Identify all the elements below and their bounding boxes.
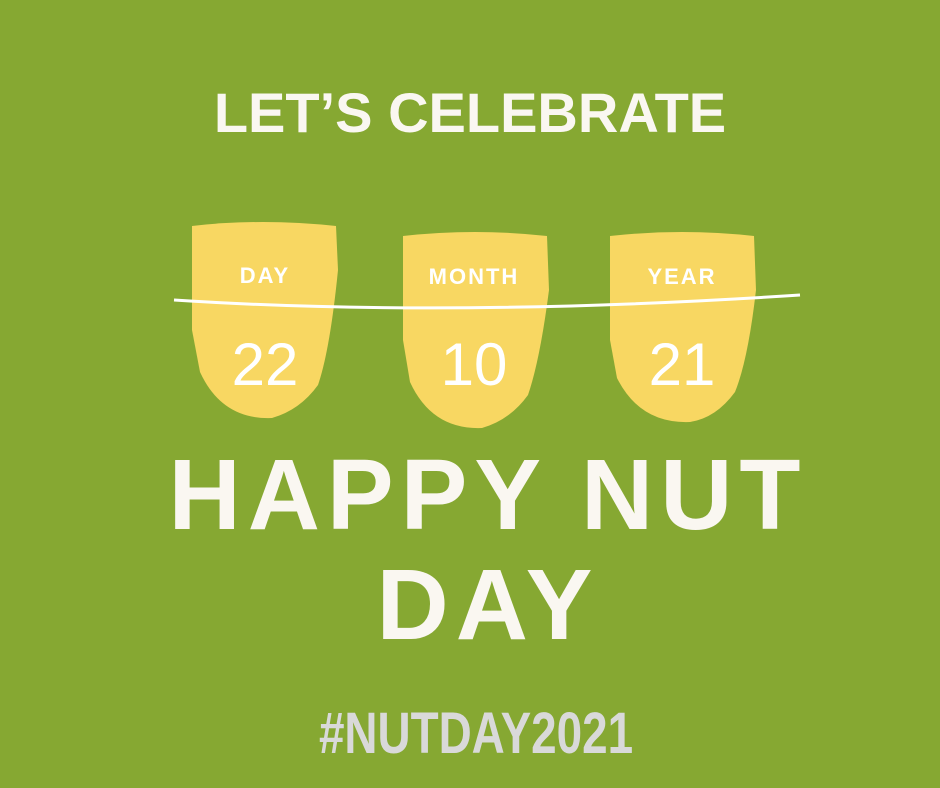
card: month	[403, 232, 549, 428]
heading: happy nut day: DAY	[377, 549, 599, 661]
title: LET’S CELEBRATE	[214, 81, 726, 144]
heading: happy nut day: HAPPY NUT	[168, 439, 808, 551]
hashtag: #NUTDAY2021	[319, 701, 633, 766]
heading: happy nut day	[168, 439, 808, 661]
card: year: 21	[649, 331, 715, 398]
card: month: MONTH	[429, 264, 519, 289]
card: month: 10	[441, 331, 507, 398]
card: day: DAY	[240, 263, 290, 288]
card: year	[610, 232, 756, 422]
card: day	[192, 222, 338, 418]
card: year: YEAR	[647, 264, 717, 289]
string line	[174, 295, 800, 308]
card: day: 22	[232, 331, 298, 398]
